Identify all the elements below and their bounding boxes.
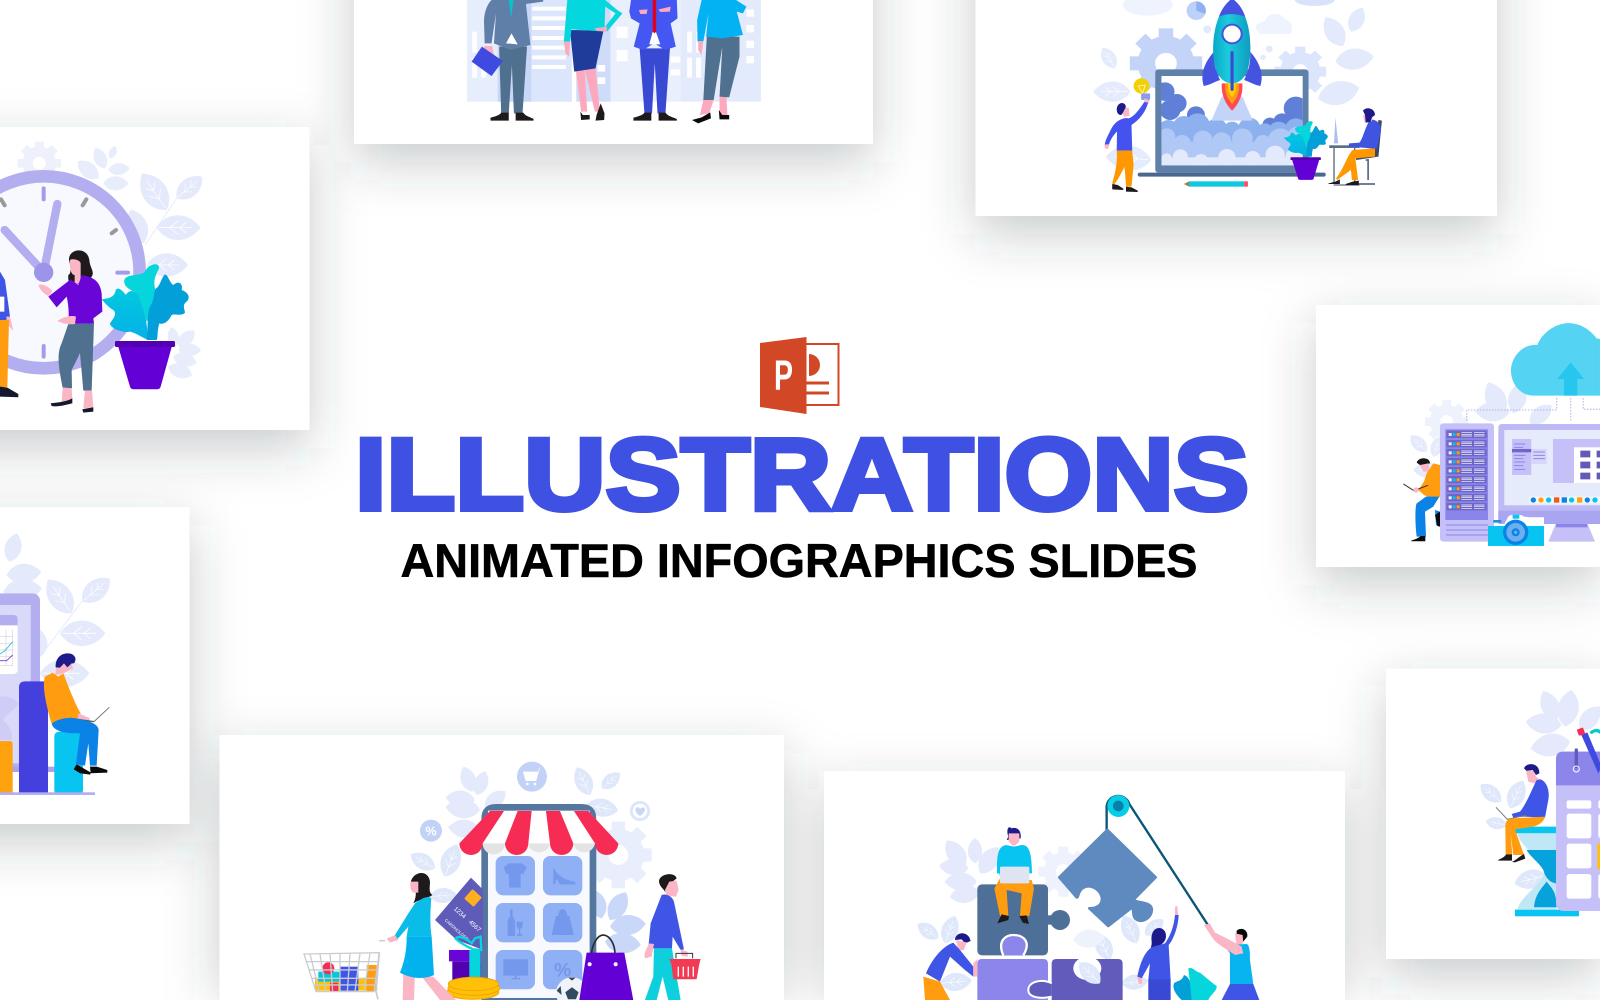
soccer ball — [556, 977, 588, 1000]
person: man on laptop — [1403, 458, 1440, 541]
person: man in blue suit with red tie — [629, 0, 678, 121]
server rack — [1440, 423, 1494, 542]
icon: percent badge — [420, 820, 442, 842]
background leaves and gear — [913, 835, 1168, 992]
puzzle piece hanging — [1059, 830, 1156, 926]
credit card: 4567 — [467, 919, 482, 934]
credit card — [435, 878, 483, 950]
gold coins — [447, 977, 500, 999]
background leaves and gear — [407, 764, 652, 955]
panel: business team — [354, 0, 873, 144]
icon: pencil and clip — [1577, 727, 1600, 773]
plant in pot — [1284, 121, 1328, 180]
panel: rocket launch — [976, 0, 1497, 216]
monitor with charts — [0, 593, 40, 770]
bar chart — [0, 681, 95, 795]
subtitle: ANIMATED INFOGRAPHICS SLIDES — [400, 534, 1198, 587]
person: woman with shopping cart — [387, 873, 456, 1000]
person: man pulling rope — [1204, 923, 1259, 1000]
person: man sitting on puzzle with laptop — [994, 827, 1034, 924]
background gear and leaves — [18, 142, 208, 382]
icon: cart badge — [517, 762, 547, 792]
person: man sitting on hourglass with laptop — [1496, 764, 1549, 862]
credit card: CARDHOLDER — [444, 918, 470, 942]
plant in pot — [102, 264, 189, 389]
city skyline background — [467, 0, 761, 102]
plant — [1173, 968, 1217, 1000]
puzzle pieces stacked — [977, 884, 1123, 1000]
person: man in grey suit with folder — [472, 0, 543, 121]
icon: PowerPoint logo: P — [774, 352, 793, 400]
panel: cloud server — [1316, 305, 1600, 567]
panel: calendar and time — [1386, 668, 1600, 959]
panel: clock and team — [0, 127, 309, 430]
background leaves — [1476, 687, 1600, 893]
computer monitor — [1498, 424, 1600, 542]
icon: cloud with upload arrow — [1467, 323, 1600, 422]
person: woman raising arm — [1137, 906, 1179, 1000]
person: man sitting with laptop — [44, 653, 109, 775]
person: man pushing puzzle — [923, 933, 977, 1000]
person: man working at desk — [1329, 108, 1382, 185]
icon: heart badge — [631, 802, 649, 820]
person: man at left edge — [0, 272, 18, 397]
person: man holding light bulb — [1105, 78, 1150, 192]
title: ILLUSTRATIONS — [355, 418, 1249, 532]
shopping cart with goods — [304, 941, 385, 999]
phone storefront — [459, 804, 618, 1000]
pencil — [1184, 181, 1248, 187]
icon: PowerPoint logo — [760, 337, 838, 414]
background leaves and gear — [1410, 382, 1552, 478]
credit card: 1234 — [452, 906, 467, 921]
icon: camera — [1488, 515, 1544, 546]
background leaves — [1, 531, 116, 687]
pulley with rope — [1107, 795, 1213, 933]
calendar — [1556, 748, 1600, 911]
phone storefront: % — [554, 961, 571, 982]
panel: puzzle teamwork — [824, 771, 1345, 1000]
person: woman in purple sweater — [38, 250, 102, 413]
hourglass — [1515, 827, 1579, 916]
panel: online shop — [220, 735, 784, 1000]
laptop with clouds on screen — [1138, 69, 1326, 177]
gift box — [449, 937, 481, 981]
rocket — [1202, 0, 1262, 121]
person: woman in teal top and navy skirt — [564, 0, 622, 121]
shopping bag — [579, 935, 633, 1000]
background clouds, gears and leaves — [1093, 0, 1375, 172]
clock — [0, 176, 140, 368]
icon: percent badge: % — [425, 824, 437, 838]
person: man with basket — [645, 874, 701, 1000]
panel: analytics — [0, 507, 189, 824]
person: woman in blue top and grey trousers — [692, 0, 746, 123]
